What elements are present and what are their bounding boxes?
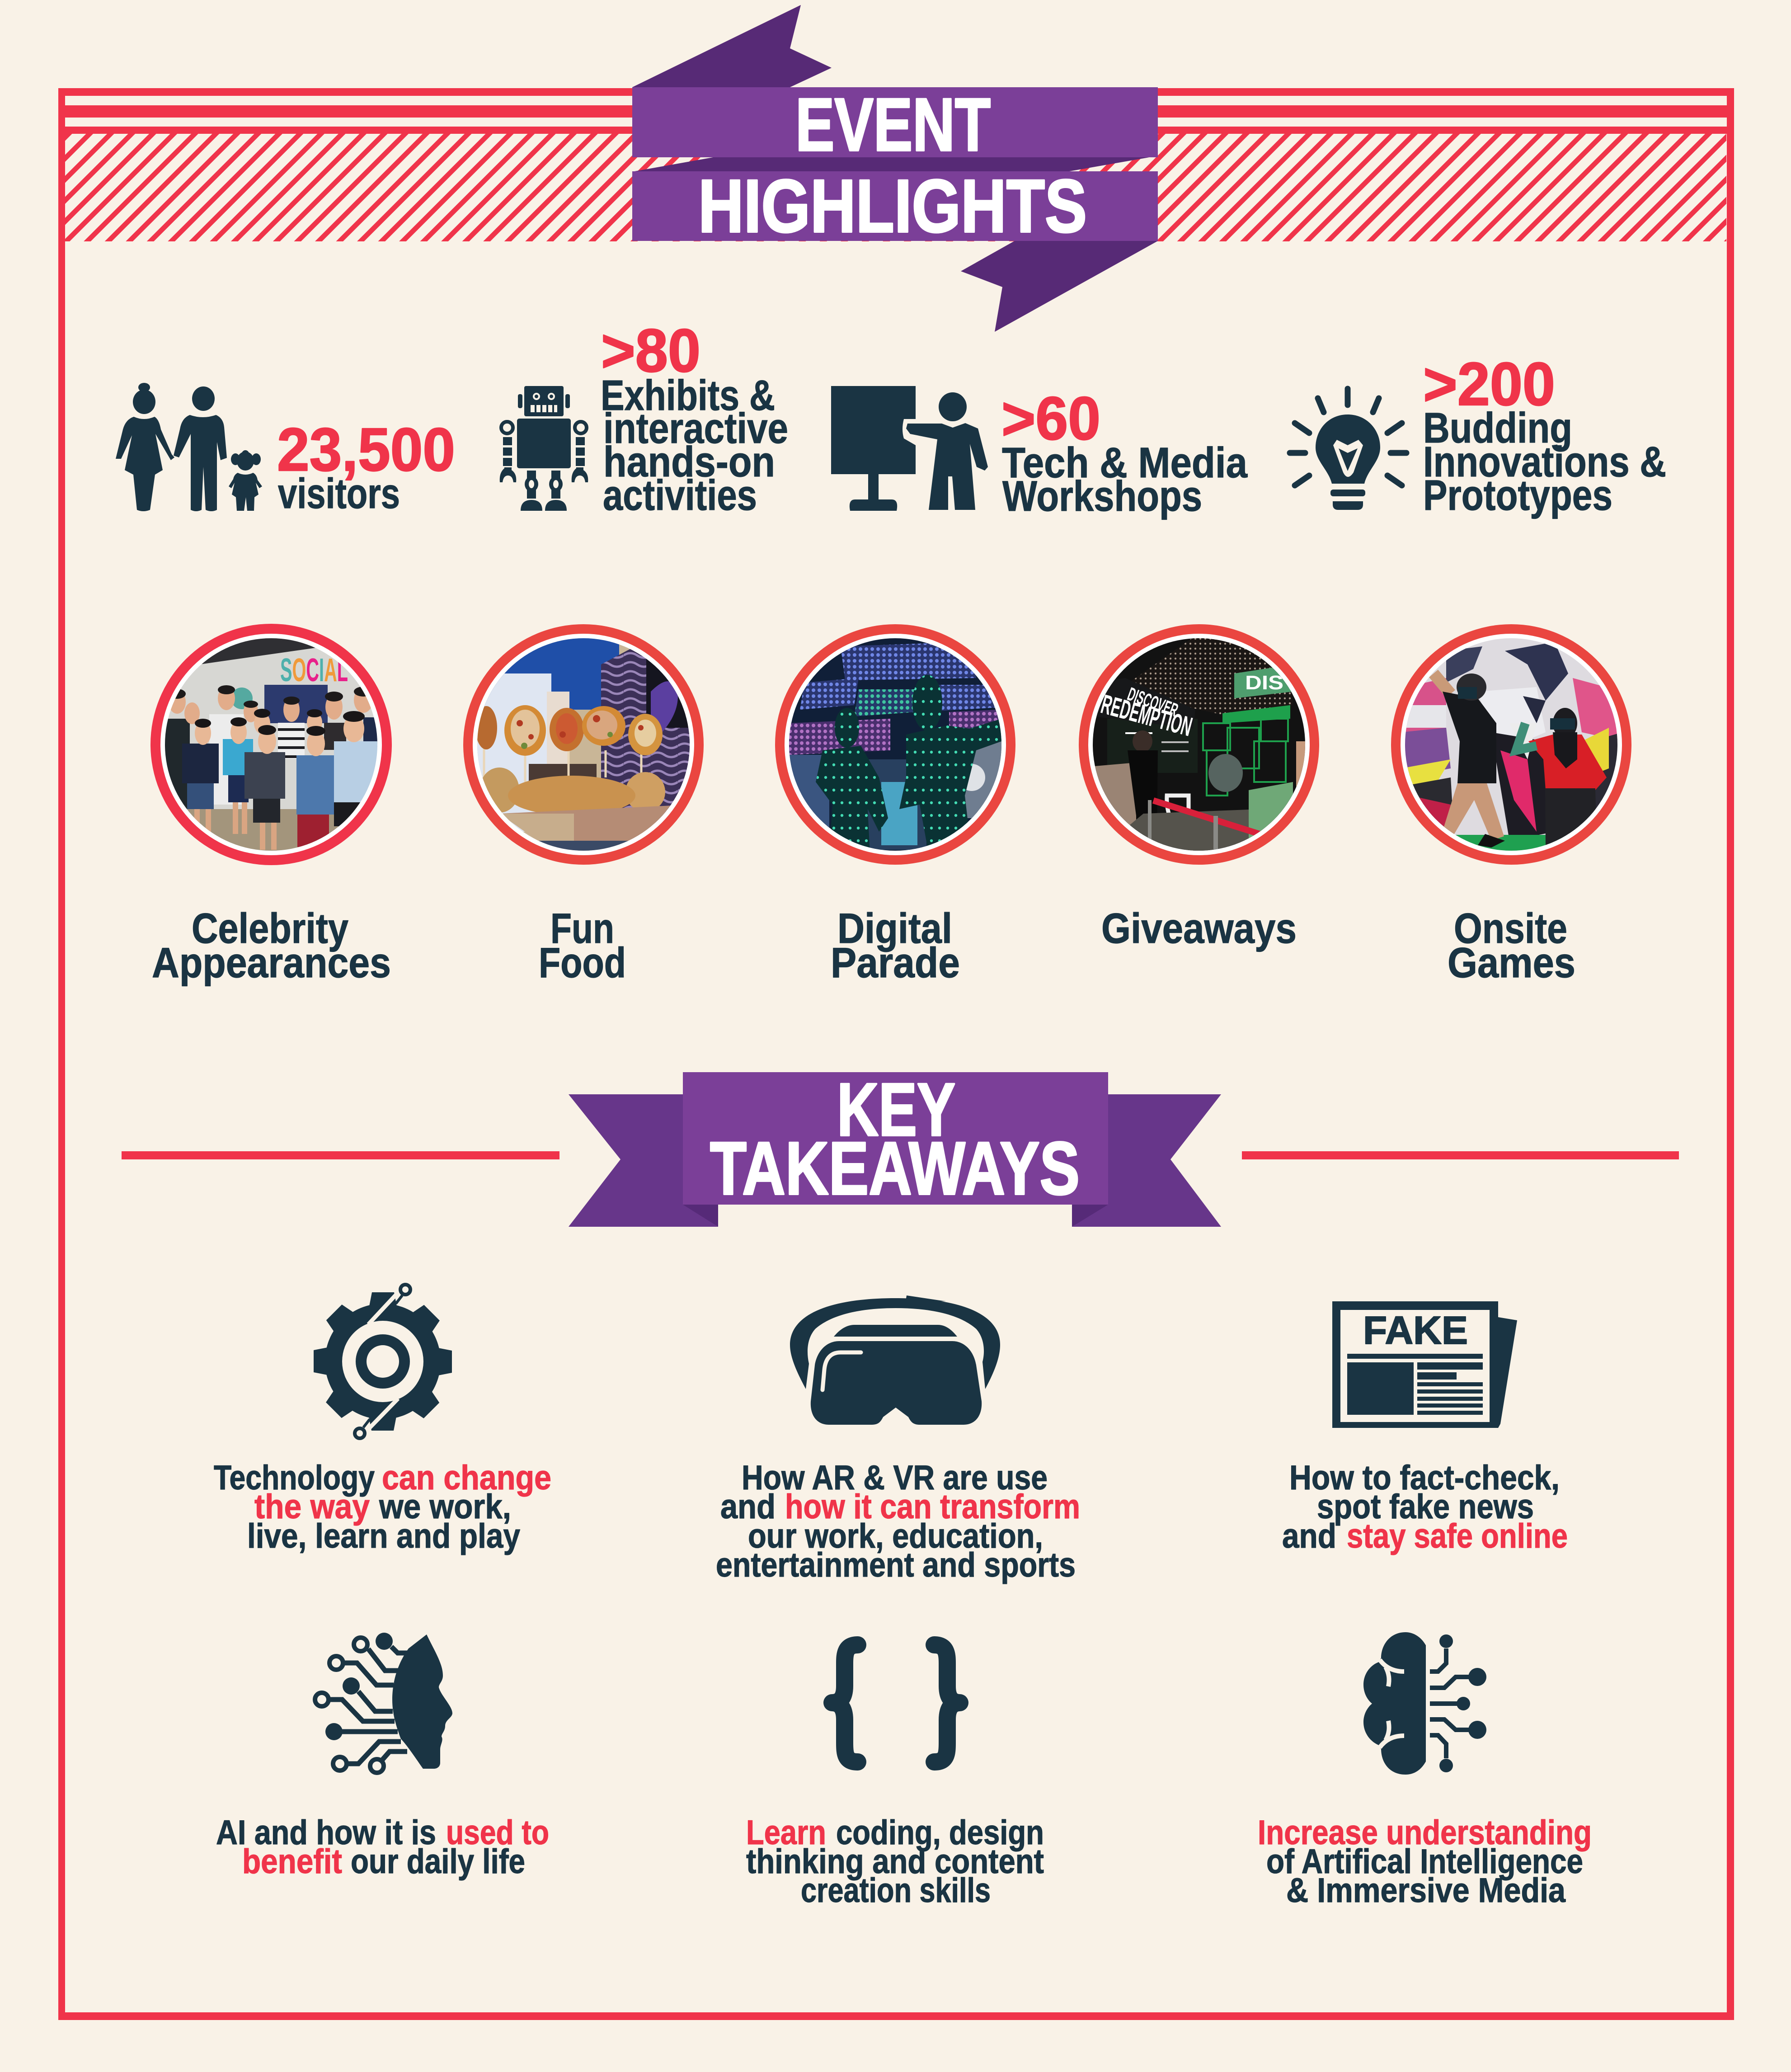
title ribbon: event highlights: HIGHLIGHTS: [698, 165, 1087, 248]
text: technology: can change: [382, 1459, 551, 1497]
text: learn coding: [746, 1813, 1044, 1910]
stat: >60 workshops: Workshops: [1002, 472, 1202, 520]
stat: >200 innovations: Prototypes: [1423, 471, 1612, 519]
icon: ai head with circuits: [315, 1633, 452, 1773]
icon: robot: [500, 386, 588, 511]
text: technology: we work,: [379, 1488, 511, 1526]
title ribbon: event highlights: EVENT: [795, 83, 991, 167]
stat: 23,500 visitors: [277, 415, 455, 517]
icon: fake newspaper: [906, 1295, 1517, 1428]
label: fun food: Food: [539, 939, 626, 986]
text: technology: the way: [254, 1488, 370, 1526]
text: ar and vr: how it can transform: [785, 1488, 1080, 1526]
stat: >200 innovations: Innovations &: [1423, 438, 1666, 486]
hatched header band: [65, 134, 1726, 241]
divider line left: [122, 1151, 559, 1159]
icon: gear with circuit: [314, 1285, 452, 1438]
icon: curly braces: [832, 1645, 960, 1762]
label: celebrity appearances: Appearances: [152, 939, 391, 986]
text: ar and vr: and: [720, 1488, 776, 1526]
text: ar and vr: our work, education,: [748, 1517, 1043, 1555]
icon: presenter at screen: [831, 386, 988, 511]
label: fun food: [539, 904, 626, 986]
title ribbon: event highlights: [632, 5, 1158, 332]
stat: >80 exhibits: [601, 316, 788, 519]
label: digital parade: Digital: [837, 904, 952, 952]
label: celebrity appearances: Celebrity: [192, 904, 348, 952]
photo: digital parade: [775, 624, 1015, 865]
photo: giveaways: REDEMPTION: [1098, 689, 1195, 742]
text: increase understanding: & Immersive Media: [1286, 1871, 1566, 1910]
icon: brain with circuits: [1363, 1632, 1486, 1775]
text: learn coding: thinking and content: [746, 1842, 1044, 1881]
icon: light bulb: [1290, 389, 1406, 510]
label: giveaways: Giveaways: [1101, 904, 1297, 952]
label: digital parade: Parade: [831, 939, 960, 986]
heading ribbon: key takeaways: [569, 1068, 1221, 1227]
stat: >80 exhibits: hands-on: [603, 438, 775, 486]
text: increase understanding: [1258, 1813, 1592, 1910]
photo: giveaways: DISCOVER: [1125, 683, 1181, 721]
stat: 23,500 visitors: 23,500: [277, 415, 455, 484]
label: fun food: Fun: [550, 904, 614, 952]
text: ai benefit: benefit: [242, 1842, 342, 1881]
label: onsite games: Games: [1448, 939, 1575, 986]
text: fact-check: spot fake news: [1317, 1488, 1534, 1526]
text: fact-check: and: [1282, 1517, 1336, 1555]
photo: giveaways: [1079, 624, 1319, 865]
stat: 23,500 visitors: visitors: [278, 470, 400, 517]
label: digital parade: [831, 904, 960, 986]
text: technology: [214, 1459, 551, 1555]
label: celebrity appearances: [152, 904, 391, 986]
text: learn coding: coding, design: [836, 1813, 1044, 1852]
icon: vr headset: [790, 1298, 1000, 1425]
icon: family: [116, 383, 262, 511]
stat: >200 innovations: >200: [1423, 350, 1555, 418]
photo: fun food: [463, 624, 704, 865]
text: ai benefit: AI and how it is: [216, 1813, 436, 1852]
text: ar and vr: How AR & VR are use: [742, 1459, 1048, 1497]
text: fact-check: [1282, 1459, 1568, 1555]
stat: >200 innovations: [1423, 350, 1666, 519]
photo: onsite games: [1391, 624, 1631, 865]
text: ar and vr: [716, 1459, 1080, 1584]
text: ai benefit: [216, 1813, 549, 1881]
label: onsite games: [1448, 904, 1575, 986]
photo: giveaways: DIS: [1245, 672, 1283, 694]
divider line right: [1242, 1151, 1679, 1159]
heading ribbon: key takeaways: KEY: [837, 1068, 955, 1152]
text: ai benefit: our daily life: [351, 1842, 525, 1881]
photo: celebrity appearances: SOCIAL: [280, 652, 348, 688]
text: fact-check: stay safe online: [1347, 1517, 1568, 1555]
stat: >80 exhibits: interactive: [603, 405, 788, 452]
stat: >80 exhibits: Exhibits &: [601, 372, 775, 419]
icon: fake newspaper: FAKE: [1363, 1309, 1468, 1352]
text: increase understanding: Increase understanding: [1258, 1813, 1592, 1852]
text: learn coding: Learn: [746, 1813, 826, 1852]
label: onsite games: Onsite: [1454, 904, 1567, 952]
stat: >60 workshops: Tech & Media: [1002, 439, 1248, 487]
text: increase understanding: of Artifical Intelligence: [1266, 1842, 1583, 1881]
stat: >80 exhibits: activities: [603, 471, 757, 519]
text: ar and vr: entertainment and sports: [716, 1546, 1076, 1584]
photo: celebrity appearances: [150, 624, 392, 865]
stat: >60 workshops: [1001, 384, 1248, 520]
stat: >200 innovations: Budding: [1423, 404, 1572, 452]
text: learn coding: creation skills: [801, 1871, 991, 1910]
heading ribbon: key takeaways: TAKEAWAYS: [710, 1127, 1080, 1210]
text: fact-check: How to fact-check,: [1289, 1459, 1560, 1497]
text: technology: Technology: [214, 1459, 375, 1497]
text: ai benefit: used to: [446, 1813, 549, 1852]
text: technology: live, learn and play: [247, 1517, 520, 1555]
stat: >80 exhibits: >80: [601, 316, 700, 385]
stat: >60 workshops: >60: [1001, 384, 1100, 452]
